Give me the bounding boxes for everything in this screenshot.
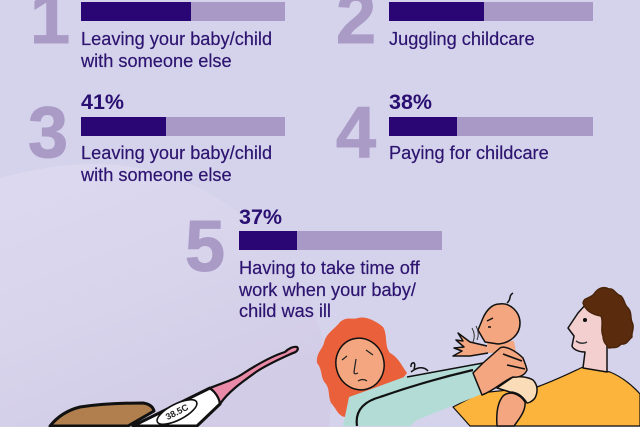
item 3 label: Leaving your baby/child [81, 143, 272, 163]
icon: thermometer: 38.5C [164, 402, 190, 422]
item 3 number: 3 [28, 93, 68, 173]
item 5 label: child was ill [239, 301, 331, 321]
item 4 bar [389, 117, 593, 136]
item 4 label: Paying for childcare [389, 143, 549, 163]
icon: thermometer [50, 347, 298, 427]
item 5 label: work when your baby/ [239, 280, 416, 300]
item 4 number: 4 [336, 93, 376, 173]
illustration: thermometer and family [48, 286, 640, 427]
figure: baby [453, 293, 537, 426]
figure: woman [317, 318, 527, 426]
item 2 label: Juggling childcare [389, 29, 535, 49]
item 5 number: 5 [185, 207, 225, 287]
item 5 label [238, 258, 420, 321]
item 1 label [80, 29, 272, 71]
item 2 bar [389, 2, 593, 21]
item 4 percent: 38% [389, 90, 432, 114]
item 1 label: Leaving your baby/child [81, 29, 272, 49]
item 1 label: with someone else [81, 51, 232, 71]
item 1 bar [81, 2, 285, 21]
item 3 bar [81, 117, 285, 136]
item 5 label: Having to take time off [239, 258, 420, 278]
item 3 percent: 41% [81, 90, 124, 114]
item 5 bar [239, 231, 442, 250]
item 3 label [80, 143, 272, 185]
item 5 percent: 37% [239, 205, 282, 229]
figure: man [453, 288, 640, 426]
item 3 label: with someone else [81, 165, 232, 185]
